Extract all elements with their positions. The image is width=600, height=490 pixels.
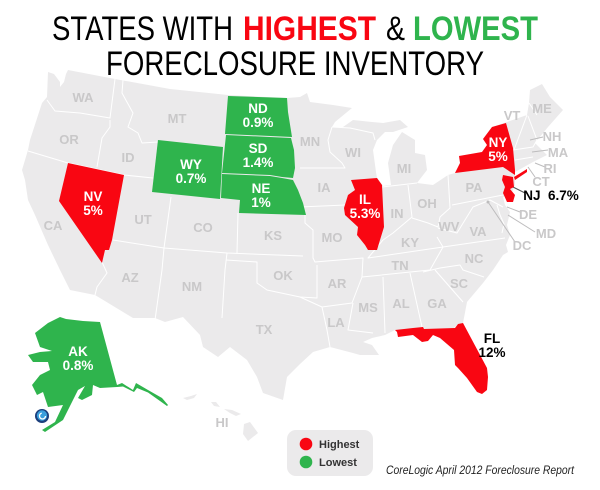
title: FORECLOSURE INVENTORY: [106, 45, 484, 83]
source note: CoreLogic April 2012 Foreclosure Report: [386, 465, 575, 477]
highlighted state values in white: AK: [68, 344, 88, 359]
gray state labels: WV: [439, 219, 460, 234]
state: Wyoming: [152, 140, 223, 199]
gray state labels: RI: [544, 161, 556, 176]
gray state labels: KS: [264, 228, 282, 243]
leader lines for small states: [486, 137, 548, 242]
gray state labels: AL: [392, 296, 410, 311]
title: &: [386, 10, 405, 48]
highlighted state values in white: 5%: [488, 149, 508, 164]
gray state labels: LA: [327, 315, 345, 330]
map: contiguous United States: [22, 70, 563, 400]
state: North Dakota: [225, 96, 292, 137]
state: Alaska: [28, 317, 168, 432]
legend: Lowest: [319, 457, 357, 469]
gray state labels: ME: [532, 101, 552, 116]
gray state labels: NM: [182, 279, 202, 294]
gray state labels: CO: [193, 220, 213, 235]
state: Florida: [395, 323, 488, 394]
highlighted state values in white: NV: [84, 189, 102, 204]
gray state labels: IA: [318, 180, 331, 195]
gray state labels: MA: [548, 145, 569, 160]
highlighted state values in white: [63, 101, 508, 373]
gray state labels: HI: [216, 415, 228, 430]
gray state labels: MO: [322, 230, 342, 245]
highlighted state values in white: WY: [180, 157, 202, 172]
outside state values in black: FL: [484, 331, 500, 346]
state: Hawaii islands: [183, 394, 258, 441]
highlighted state values in white: SD: [249, 141, 268, 156]
gray state labels: AR: [328, 276, 347, 291]
outside state values in black: 12%: [478, 345, 506, 360]
gray state labels: MD: [536, 226, 556, 241]
gray state labels: TX: [256, 322, 273, 337]
legend: [287, 430, 373, 476]
highlighted state values in white: 0.9%: [243, 115, 273, 130]
icon: swirl logo: [35, 409, 49, 423]
gray state labels: WI: [345, 145, 361, 160]
gray state labels: OH: [417, 196, 437, 211]
highlighted state values in white: IL: [359, 192, 371, 207]
highlighted state values in white: NE: [252, 181, 270, 196]
gray state labels: WA: [73, 90, 94, 105]
highlighted state values in white: 1.4%: [243, 155, 273, 170]
gray state labels: PA: [465, 180, 483, 195]
gray state labels: MT: [168, 111, 186, 126]
gray state labels: ID: [122, 150, 134, 165]
gray state labels: DE: [519, 207, 537, 222]
gray state labels: SC: [450, 276, 469, 291]
state: Nebraska: [221, 174, 306, 215]
gray state labels: CA: [44, 218, 63, 233]
gray state labels: MS: [358, 300, 378, 315]
gray state labels: DC: [513, 238, 532, 253]
title: LOWEST: [413, 10, 538, 48]
gray state labels: VA: [469, 224, 487, 239]
gray state labels: OK: [273, 268, 293, 283]
gray state labels: KY: [401, 235, 419, 250]
gray state labels: UT: [134, 212, 152, 227]
highlighted state values in white: 5.3%: [350, 206, 380, 221]
gray state labels: CT: [532, 174, 550, 189]
gray state labels: IN: [390, 206, 404, 221]
state: New Jersey: [502, 175, 515, 202]
gray state labels: TN: [391, 258, 409, 273]
gray state labels: NH: [543, 129, 561, 144]
highlighted state values in white: 5%: [83, 203, 103, 218]
state: Long Island: [514, 169, 527, 180]
state: South Dakota: [222, 135, 295, 178]
highlighted state values in white: NY: [489, 135, 507, 150]
gray state labels: [44, 90, 569, 430]
outside state values in black: [478, 188, 579, 360]
state: New York: [455, 123, 515, 175]
title: HIGHEST: [243, 10, 376, 48]
gray state labels: GA: [427, 296, 447, 311]
highlighted state values in white: 1%: [251, 195, 271, 210]
highlighted state values in white: ND: [248, 101, 268, 116]
title: [52, 10, 538, 83]
highlighted state values in white: 0.8%: [63, 358, 93, 373]
title: STATES WITH: [52, 10, 233, 48]
gray state labels: VT: [504, 108, 520, 123]
gray state labels: AZ: [121, 270, 139, 285]
state borders: [28, 79, 537, 347]
gray state labels: MI: [397, 161, 411, 176]
state: Nevada: [59, 163, 124, 263]
gray state labels: MN: [300, 134, 320, 149]
state: Illinois: [344, 178, 384, 250]
gray state labels: NC: [465, 251, 484, 266]
legend: Highest: [319, 439, 360, 451]
outside state values in black: NJ 6.7%: [523, 188, 579, 203]
gray state labels: OR: [59, 132, 79, 147]
highlighted state values in white: 0.7%: [176, 171, 206, 186]
